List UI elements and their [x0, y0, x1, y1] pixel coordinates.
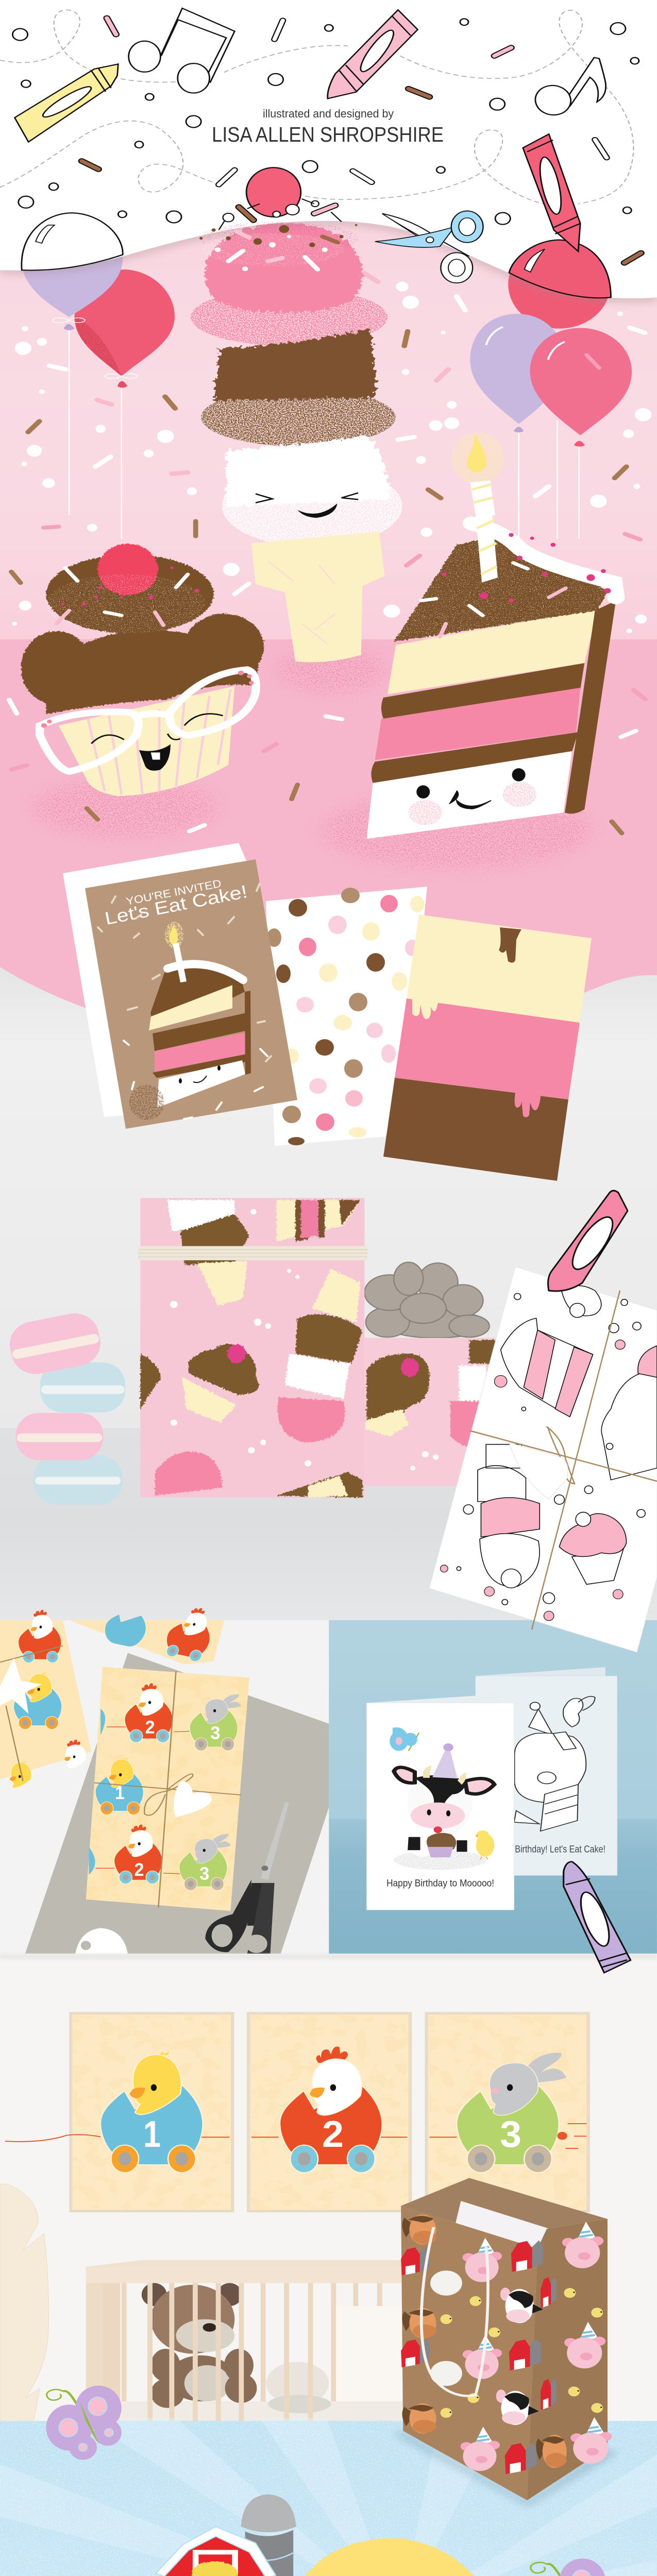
twine and heart tag [94, 1671, 241, 1908]
balloons and ice cream scoops behind the top paper [14, 213, 651, 547]
title: LISA ALLEN SHROPSHIRE [212, 123, 444, 146]
balloon outline upper halves [22, 213, 123, 270]
shadows on the table [33, 647, 591, 869]
numbers on train cars: 2 [134, 1860, 144, 1880]
left wrapped gift [0, 1610, 91, 1788]
numbers on train cars: 2 [145, 1718, 155, 1738]
candle lower part [476, 515, 498, 583]
panel: farm scene sky [0, 2418, 657, 2576]
tall wrapped gift [138, 1198, 367, 1498]
white sugar dots on wall [14, 282, 651, 507]
dashed flight paths [0, 10, 633, 298]
top white paper area with doodles [0, 0, 657, 298]
macarons stack [5, 1309, 125, 1504]
numbers on train cars: 3 [210, 1723, 220, 1743]
scissors on felt [205, 1803, 289, 1954]
red barn [156, 2527, 276, 2576]
icon: double music note [129, 8, 234, 93]
wooden surfboard shape [0, 2184, 49, 2421]
poster numbers: 3 [500, 2114, 521, 2155]
ice cream cone [251, 532, 384, 662]
cow card caption: Happy Birthday to Mooooo! [386, 1877, 494, 1889]
icon: pink crayon on gift [548, 1191, 628, 1291]
tissue paper [454, 2201, 550, 2250]
bag side face [527, 2219, 608, 2500]
dots on table and wall [12, 524, 647, 633]
panel: farm animal gift bag [394, 2178, 616, 2506]
icon: butterfly on sky edge [46, 2385, 122, 2460]
paper shadow [0, 221, 657, 298]
ring confetti [12, 19, 639, 225]
icon: yellow crayon [14, 64, 118, 142]
train car 2 lower [114, 1824, 162, 1884]
ice cream: chocolate scoop [201, 329, 396, 446]
section: pink party hero background [0, 0, 657, 1620]
section: nursery wall background [0, 1620, 657, 2424]
glasses [40, 670, 256, 771]
wall poster 1: chick car [5, 2013, 232, 2211]
top scoop sprinkle line art [562, 1286, 601, 1317]
band shadow [0, 1954, 657, 1959]
confetti sprinkles on wall [28, 274, 645, 498]
balloon strings [69, 329, 579, 539]
title: illustrated and designed by [263, 107, 394, 120]
grey felt sheet [25, 1653, 329, 1954]
neapolitan stripe card [383, 914, 592, 1181]
balloon: right pink [530, 328, 632, 447]
panel: nursery scene [0, 2013, 588, 2421]
poster numbers [143, 2114, 521, 2155]
bag pattern faces [401, 2214, 612, 2474]
silo [241, 2495, 296, 2576]
top wrapped gift [69, 1606, 224, 1665]
panel: black and white wrapped gift [429, 1191, 657, 1652]
mini cake illustration [129, 922, 251, 1120]
icon: scissors [375, 211, 483, 283]
icon: pink crayon [328, 10, 418, 98]
train car 2 [125, 1683, 173, 1742]
invitation text: YOU'RE INVITED [125, 877, 222, 908]
icon: purple crayon [564, 1861, 631, 1973]
numbers on train cars: 1 [115, 1784, 125, 1803]
panel: stationery cards [63, 843, 592, 1181]
kraft invitation card [85, 859, 297, 1129]
small cow [394, 1743, 494, 1857]
train car 3 lower [179, 1834, 231, 1890]
lower balloon string and sprinkles on table [9, 521, 645, 833]
cupcake face [91, 714, 223, 743]
bag front face [401, 2206, 537, 2500]
character: cake slice with candle [366, 515, 616, 839]
balloon: left red [75, 269, 175, 388]
train car 3 [190, 1694, 241, 1751]
numbers on train cars [115, 1718, 220, 1884]
twine and heart gift tag [470, 1291, 657, 1630]
paper [0, 0, 657, 298]
balloon: left purple lower half [22, 213, 123, 330]
title [212, 107, 444, 146]
bag shadow [394, 2431, 616, 2506]
cherry on scoop [218, 167, 342, 230]
line art cake slice [501, 1318, 593, 1417]
front cow card [366, 1694, 514, 1910]
poster numbers: 1 [143, 2114, 161, 2155]
line art second ice cream [601, 1346, 657, 1480]
candle [470, 480, 495, 515]
train car 1 [95, 1758, 143, 1815]
line art cupcake [559, 1512, 627, 1584]
white envelope [63, 843, 258, 1117]
icon: single music note [531, 58, 606, 118]
pink and outlined confetti [457, 1293, 645, 1605]
white tag under scissors [75, 1928, 128, 1954]
left photo surface [0, 1620, 329, 1954]
balloon: right red lower half [508, 240, 611, 329]
crib [86, 2260, 407, 2421]
outlined sprinkles [82, 18, 641, 263]
polka dot card [266, 887, 427, 1146]
teddy bear [142, 2283, 257, 2421]
bag interior back panel [401, 2178, 608, 2248]
back coloring card [476, 1667, 617, 1875]
small chick [475, 1831, 494, 1859]
panel: gifts photo [5, 1198, 497, 1504]
numbers on train cars: 3 [199, 1864, 209, 1884]
poster numbers: 2 [322, 2114, 344, 2155]
small wrapped gift [364, 1338, 497, 1486]
sprinkles on scoop top [199, 222, 358, 271]
icon: butterfly right [530, 2558, 605, 2576]
wall poster 3: bunny car [427, 2013, 588, 2211]
wall poster 2: hen car [248, 2013, 410, 2211]
cake face [409, 768, 536, 825]
crib pillows [266, 2283, 331, 2421]
ice cream: vanilla scoop with face [222, 435, 402, 547]
ice cream: pink scoop [191, 224, 388, 346]
character: cupcake with glasses [21, 544, 264, 796]
main wrapped gift with toy train print [86, 1667, 249, 1911]
candle top and flame [452, 432, 503, 515]
blue panel [329, 1620, 657, 1819]
balloon outline red upper half [509, 240, 611, 298]
balloon: right purple [470, 314, 566, 432]
flame glow [452, 432, 503, 485]
invitation text: Let's Eat Cake! [103, 882, 249, 929]
icon: red crayon [523, 134, 580, 251]
panel: farm landscape [0, 2495, 657, 2576]
vanilla cone and table shadows [9, 515, 647, 869]
line art ice cream stack [478, 1445, 540, 1588]
bag rope handle [422, 2227, 488, 2396]
sun [293, 2538, 501, 2576]
panel: farm animals gift photo [0, 1606, 657, 1973]
grey ribbon bow [364, 1262, 490, 1338]
coloring card caption: Birthday! Let's Eat Cake! [515, 1844, 605, 1855]
